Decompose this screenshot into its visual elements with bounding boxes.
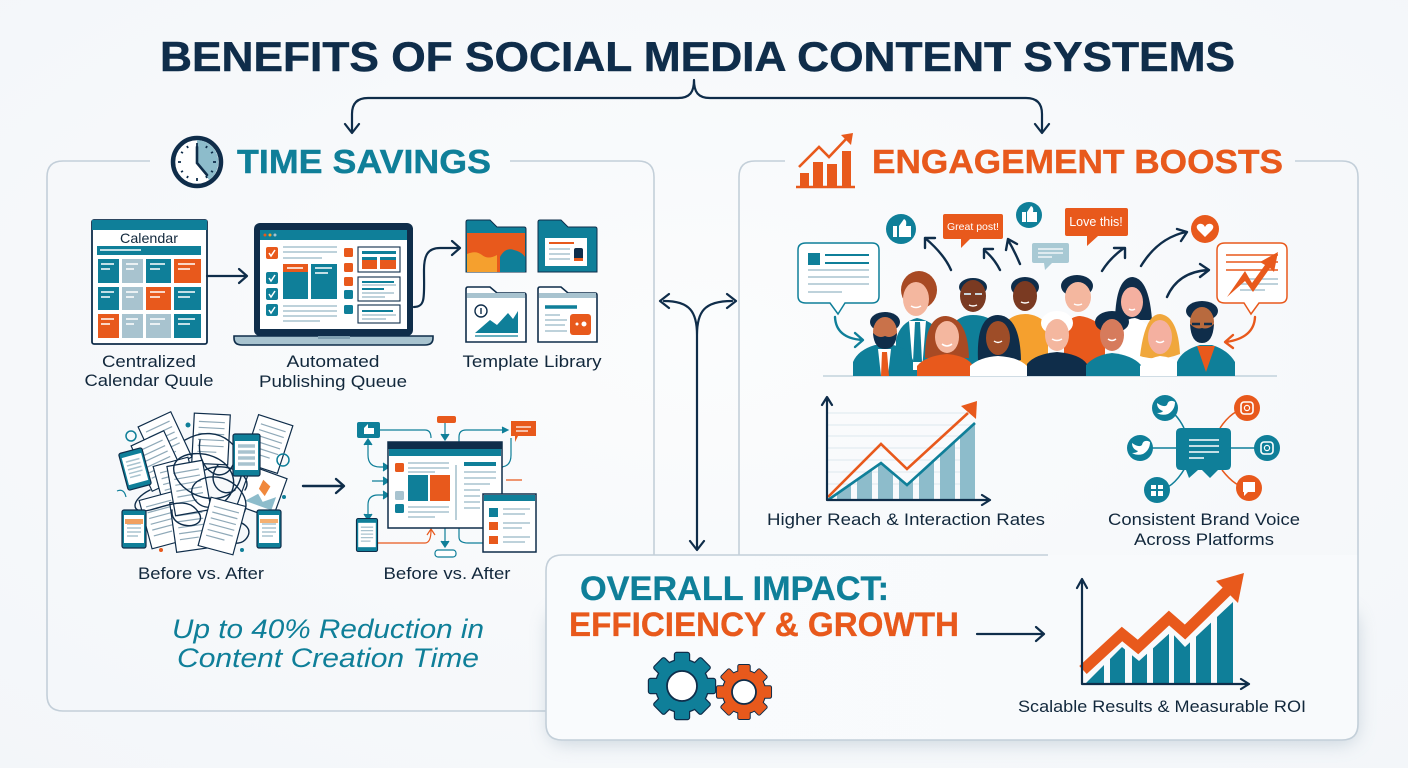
bubble: great post [943, 214, 1003, 248]
bubble: right chart [1217, 243, 1287, 314]
title: BENEFITS OF SOCIAL MEDIA CONTENT SYSTEMS [160, 33, 1235, 80]
label: automated publishing: Publishing Queue [259, 373, 407, 391]
panel: engagement boosts [739, 133, 1358, 555]
chart: higher reach [822, 397, 990, 505]
label: brand voice: Across Platforms [1134, 531, 1274, 549]
person: yellow shirt man [1008, 277, 1048, 376]
icon: calendar: Calendar [120, 230, 178, 246]
person: tall man [896, 271, 942, 376]
label: scalable results: Scalable Results & Measurable ROI [1018, 698, 1306, 716]
arrow: before to after [303, 479, 344, 493]
diagram: brand voice hub [1127, 395, 1280, 503]
heading: efficiency and growth: EFFICIENCY & GROWTH [569, 606, 959, 644]
person: long hair woman [1115, 277, 1155, 376]
person: brown hair woman [917, 316, 973, 376]
label: brand voice: Consistent Brand Voice [1108, 511, 1300, 529]
arrow: impact to chart [977, 627, 1044, 641]
heading: overall impact: OVERALL IMPACT: [580, 570, 889, 608]
person: glasses beard man [1177, 301, 1235, 376]
illustration: after organized [356, 416, 536, 557]
bubble: love this [1065, 208, 1128, 246]
label: template library: Template Library [462, 353, 602, 371]
callout: 40 percent reduction [172, 614, 484, 673]
label: automated publishing: Automated [286, 353, 380, 371]
icon: calendar [92, 220, 207, 344]
label: centralized calendar: Centralized [102, 353, 196, 371]
heading: engagement boosts: ENGAGEMENT BOOSTS [872, 144, 1283, 181]
label: before vs after left: Before vs. After [138, 565, 265, 583]
icon: clock [173, 138, 221, 186]
illustration: before chaos [117, 412, 293, 555]
person: bearded suit man [853, 312, 913, 376]
person: white hair man [1027, 311, 1087, 376]
label: automated publishing [259, 353, 407, 391]
icon: thumbs up left [886, 214, 916, 244]
icon: template folders [466, 220, 597, 342]
bubble: grey comment [1032, 243, 1069, 270]
callout: 40 percent reduction: Content Creation Time [177, 643, 479, 673]
icon: gears [649, 653, 771, 719]
arrows: engagement flows [835, 229, 1255, 348]
heading: time savings: TIME SAVINGS [237, 144, 491, 181]
callout: 40 percent reduction: Up to 40% Reduction in [172, 614, 484, 644]
arrow: calendar to laptop [207, 269, 247, 283]
person: dark hair woman [970, 315, 1027, 376]
person: blonde woman [1140, 314, 1188, 376]
icon: thumbs up top [1016, 202, 1042, 228]
arrow: laptop to template library [414, 241, 460, 307]
panel: time savings [47, 138, 654, 711]
illustration: crowd [823, 271, 1277, 376]
bubble: left post [798, 243, 879, 314]
person: glasses man [952, 278, 998, 376]
icon: laptop publishing queue [234, 223, 433, 345]
icon: heart [1191, 215, 1219, 243]
person: curly hair orange shirt [1061, 275, 1105, 376]
bubble: great post: Great post! [947, 221, 999, 233]
arrow: central connector [660, 294, 736, 550]
label: centralized calendar [84, 353, 214, 390]
arrow: title branches to both panels [345, 80, 1049, 133]
label: centralized calendar: Calendar Quule [84, 372, 214, 390]
chart: scalable results [1077, 573, 1249, 689]
label: before vs after right: Before vs. After [384, 565, 511, 583]
panel: overall impact [546, 177, 1358, 744]
bubble: love this: Love this! [1069, 215, 1123, 229]
label: brand voice [1108, 511, 1300, 549]
label: higher reach: Higher Reach & Interaction Rates [767, 511, 1045, 529]
icon: growth chart [796, 133, 855, 187]
person: teal shirt man [1086, 311, 1141, 376]
